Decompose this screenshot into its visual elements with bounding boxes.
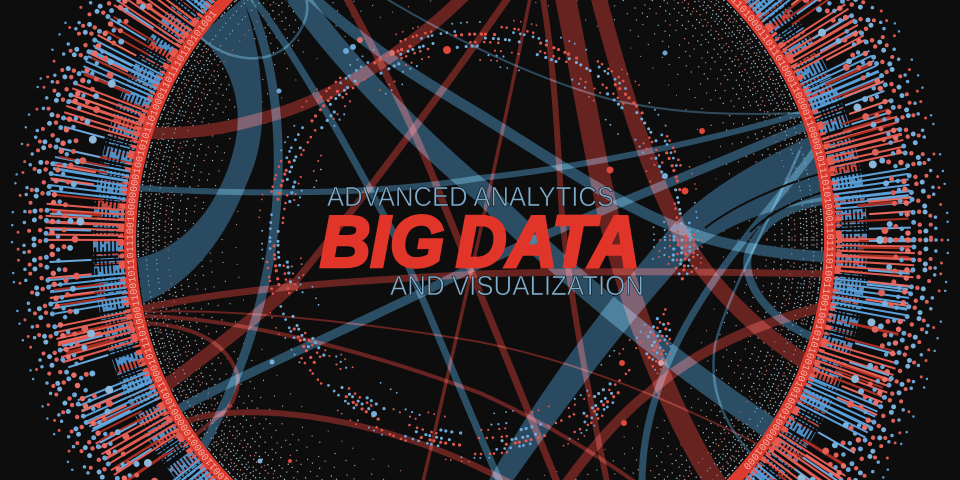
title block: [320, 181, 644, 301]
large highlighted particles: [258, 37, 705, 464]
blue ribbon group: [135, 0, 835, 480]
red binary ring: [124, 0, 836, 480]
subtitle top: ADVANCED ANALYTICS: [327, 181, 614, 212]
inner scattered speckle field: [138, 0, 822, 480]
binary digits, right arc: 1101000110110100011000011000010111010100011011101001100100101010010010100010000001000: [731, 0, 834, 470]
red ribbon group: [138, 0, 830, 480]
subtitle bottom: AND VISUALIZATION: [390, 270, 644, 301]
clustered particle belt around the title: [258, 18, 702, 462]
chord ribbons, red and blue: [135, 0, 835, 480]
main title: BIG DATA: [320, 202, 640, 282]
speckle overlay on ribbons: [146, 0, 814, 480]
dark slits in right fan: [705, 172, 830, 232]
binary digits, left arc: 1001100001000001001100010111010001100101101110010000000100101011010001101110110101001: [126, 11, 229, 480]
